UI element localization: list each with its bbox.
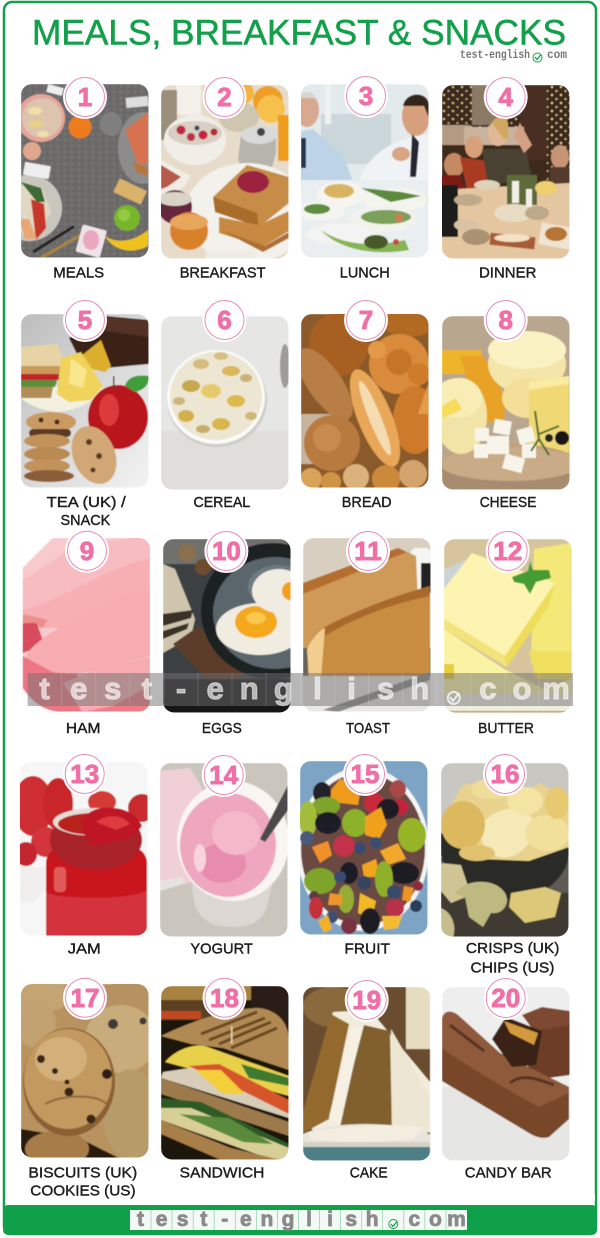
panel: 18 sandwich <box>161 976 289 1182</box>
badge 7: 7 <box>359 305 373 335</box>
badge 18 <box>202 976 246 1020</box>
panel: 13 jam <box>20 754 148 954</box>
panel: 16 crisps <box>441 752 569 976</box>
badge 10 <box>204 529 248 573</box>
badge 3 <box>344 74 388 118</box>
badge 5: 5 <box>78 305 92 335</box>
panel: 4 dinner <box>440 75 573 282</box>
badge 20 <box>484 976 528 1020</box>
badge 16: 16 <box>491 759 519 789</box>
badge 17: 17 <box>71 983 99 1013</box>
photo: butter <box>444 539 572 714</box>
label: cake: CAKE <box>350 1164 388 1182</box>
badge 1 <box>63 75 107 119</box>
label: sandwich: SANDWICH <box>180 1164 264 1182</box>
badge 2 <box>202 75 246 119</box>
badge 16 <box>483 752 527 796</box>
badge 4: 4 <box>498 82 513 112</box>
label: biscuits (uk) cookies (us): COOKIES (US) <box>30 1182 136 1200</box>
label: tea (uk) / snack: TEA (UK) / <box>47 494 127 511</box>
label: cheese: CHEESE <box>480 494 536 511</box>
badge 6 <box>202 298 246 342</box>
label: tea (uk) / snack: SNACK <box>60 512 110 529</box>
photo: lunch <box>295 84 430 258</box>
panel: 19 cake <box>303 980 430 1178</box>
panel: 10 eggs <box>163 531 290 734</box>
label: crisps (uk) chips (us): CRISPS (UK) <box>466 940 559 957</box>
badge 17 <box>63 976 107 1020</box>
panel: 8 cheese <box>442 300 570 508</box>
photo: sandwich <box>161 986 289 1160</box>
logo: test-english.com: test-english <box>460 49 530 62</box>
badge 13 <box>63 752 107 796</box>
panel: 14 yogurt <box>160 753 289 958</box>
badge 5 <box>63 298 107 342</box>
badge 8 <box>484 298 528 342</box>
panel: 20 candy bar <box>442 976 570 1182</box>
badge 9 <box>65 529 109 573</box>
label: ham: HAM <box>66 720 100 737</box>
badge 13: 13 <box>70 759 99 789</box>
panel: 3 lunch <box>295 74 430 282</box>
label: meals: MEALS <box>53 264 104 282</box>
badge 2: 2 <box>217 82 232 112</box>
badge 19 <box>345 978 389 1022</box>
photo: yogurt <box>160 763 289 937</box>
badge 14: 14 <box>209 760 239 790</box>
label: crisps (uk) chips (us): CHIPS (US) <box>470 960 554 976</box>
photo: eggs <box>163 539 290 712</box>
photo: fruit <box>297 761 429 935</box>
label: candy bar: CANDY BAR <box>465 1164 552 1182</box>
watermark band: test-englishcom <box>39 671 570 706</box>
photo: cheese <box>442 316 570 490</box>
panel: 15 fruit <box>297 752 429 958</box>
photo: snacks <box>21 314 149 491</box>
badge 9: 9 <box>80 536 94 566</box>
label: biscuits (uk) cookies (us): BISCUITS (UK) <box>28 1164 137 1182</box>
photo: candy bar <box>442 987 570 1161</box>
badge 19: 19 <box>352 985 381 1015</box>
panel: 12 butter <box>444 529 572 737</box>
badge 11 <box>346 529 390 573</box>
badge 10: 10 <box>212 536 241 566</box>
badge 15 <box>343 752 387 796</box>
label: bread: BREAD <box>342 494 392 511</box>
label: biscuits (uk) cookies (us) <box>28 1164 137 1200</box>
panel: 17 biscuits <box>21 978 148 1199</box>
photo: cereal <box>161 316 290 491</box>
panel: 1 meals <box>21 77 148 278</box>
label: fruit: FRUIT <box>344 940 390 958</box>
label: toast: TOAST <box>346 720 390 737</box>
badge 12 <box>486 529 530 573</box>
badge 15: 15 <box>351 759 379 789</box>
label: yogurt: YOGURT <box>190 940 253 958</box>
photo: cake <box>296 987 436 1162</box>
label: dinner: DINNER <box>479 264 537 282</box>
photo: breakfast <box>161 85 288 258</box>
badge 4 <box>484 75 528 119</box>
badge 6: 6 <box>217 305 232 335</box>
badge 12: 12 <box>493 536 522 566</box>
label: jam: JAM <box>68 940 101 958</box>
label: breakfast: BREAKFAST <box>180 264 266 282</box>
panel: 5 tea/snack <box>21 298 149 529</box>
photo: cookies <box>21 984 148 1158</box>
panel: 7 bread <box>301 300 428 508</box>
panel: 11 toast <box>303 529 431 737</box>
badge 7 <box>344 298 388 342</box>
badge 8: 8 <box>498 305 513 335</box>
label: lunch: LUNCH <box>340 264 390 282</box>
badge 1: 1 <box>78 82 92 112</box>
panel: 6 cereal <box>161 298 290 511</box>
label: butter: BUTTER <box>478 720 534 737</box>
photo: ham <box>23 534 151 712</box>
label: eggs: EGGS <box>202 720 242 737</box>
photo: toast <box>303 538 431 712</box>
footer watermark: test-englishcom <box>137 1208 466 1231</box>
title: MEALS, BREAKFAST & SNACKS <box>32 14 566 52</box>
badge 3: 3 <box>359 81 373 111</box>
logo: test-english.com: com <box>547 49 567 62</box>
badge 14 <box>202 753 246 797</box>
label: cereal: CEREAL <box>194 494 250 511</box>
badge 11: 11 <box>354 536 382 566</box>
badge 20: 20 <box>491 983 520 1013</box>
panel: 9 ham <box>23 529 151 737</box>
photo: meals <box>21 84 148 258</box>
photo: jam <box>20 762 148 936</box>
label: crisps (uk) chips (us) <box>466 940 559 976</box>
label: tea (uk) / snack <box>47 494 127 529</box>
photo: bread <box>301 314 428 488</box>
badge 18: 18 <box>210 983 239 1013</box>
photo: dinner <box>440 85 573 259</box>
photo: crisps <box>441 763 569 938</box>
panel: 2 breakfast <box>161 77 288 278</box>
